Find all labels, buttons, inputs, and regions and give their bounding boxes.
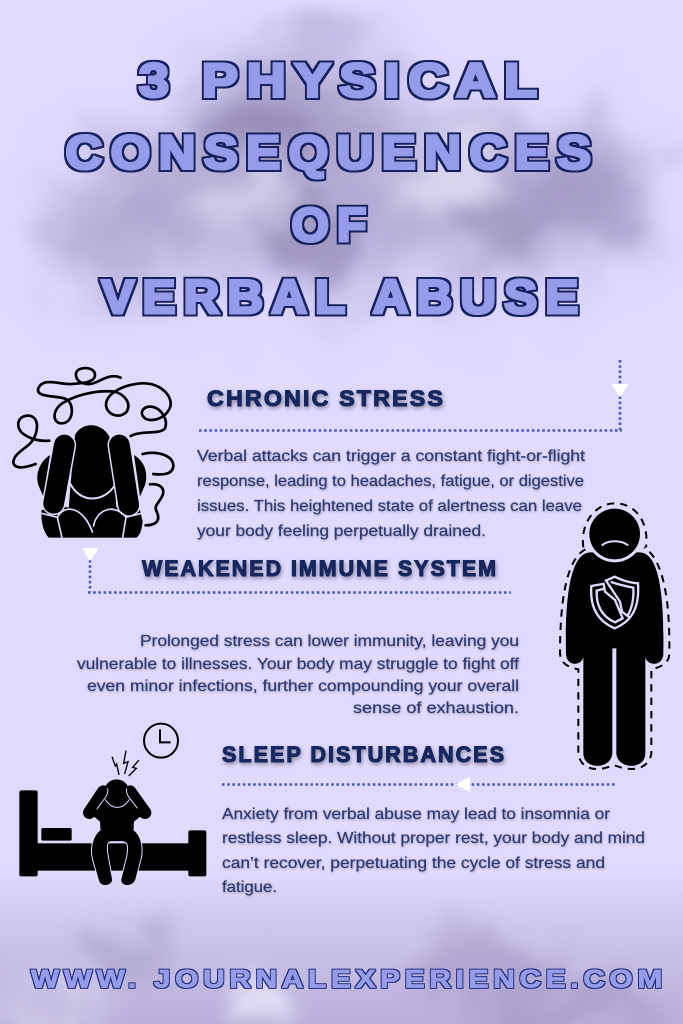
text: sleep disturbances: can’t recover, perpetuating the cycle of stress and [222, 855, 605, 872]
text: chronic stress: your body feeling perpetually drained. [197, 523, 486, 540]
icon: stressed person holding head with tangled thoughts [13, 368, 173, 538]
text: chronic stress: issues. This heightened state of alertness can leave [197, 498, 582, 515]
text: chronic stress: response, leading to headaches, fatigue, or digestive [197, 473, 584, 490]
text: chronic stress: Verbal attacks can trigger a constant fight-or-flight [197, 448, 586, 465]
text: sleep disturbances: fatigue. [222, 879, 277, 896]
title: OF [292, 198, 374, 251]
heading: sleep disturbances: SLEEP DISTURBANCES [222, 742, 506, 767]
text: sleep disturbances: Anxiety from verbal abuse may lead to insomnia or [222, 806, 611, 823]
cloud background: bottom [0, 870, 683, 1024]
text: weakened immune system [77, 633, 520, 717]
heading: weakened immune system: WEAKENED IMMUNE SYSTEM [142, 556, 498, 581]
title [66, 54, 600, 323]
text: weakened immune system: even minor infections, further compounding your overall [87, 678, 519, 695]
text: weakened immune system: Prolonged stress can lower immunity, leaving you [140, 633, 519, 650]
connector: sleep disturbances [222, 777, 617, 792]
icon: person with cracked shield and dashed outline [560, 503, 669, 769]
connector: chronic stress [199, 360, 629, 430]
text: sleep disturbances: restless sleep. Without proper rest, your body and mind [222, 830, 645, 847]
text: weakened immune system: sense of exhaustion. [353, 700, 519, 717]
connector: weakened immune system [82, 548, 511, 592]
text: chronic stress [197, 448, 586, 540]
cloud background: top [42, 17, 647, 306]
icon: person sitting on bed with clock and stress bolts [19, 724, 206, 886]
footer website: WWW. JOURNALEXPERIENCE.COM [31, 966, 667, 994]
title: 3 PHYSICAL [139, 54, 546, 106]
heading: chronic stress: CHRONIC STRESS [207, 386, 445, 411]
text: sleep disturbances [222, 806, 645, 896]
title: VERBAL ABUSE [102, 270, 586, 323]
text: weakened immune system: vulnerable to illnesses. Your body may struggle to fight off [77, 656, 520, 673]
title: CONSEQUENCES [66, 126, 600, 178]
